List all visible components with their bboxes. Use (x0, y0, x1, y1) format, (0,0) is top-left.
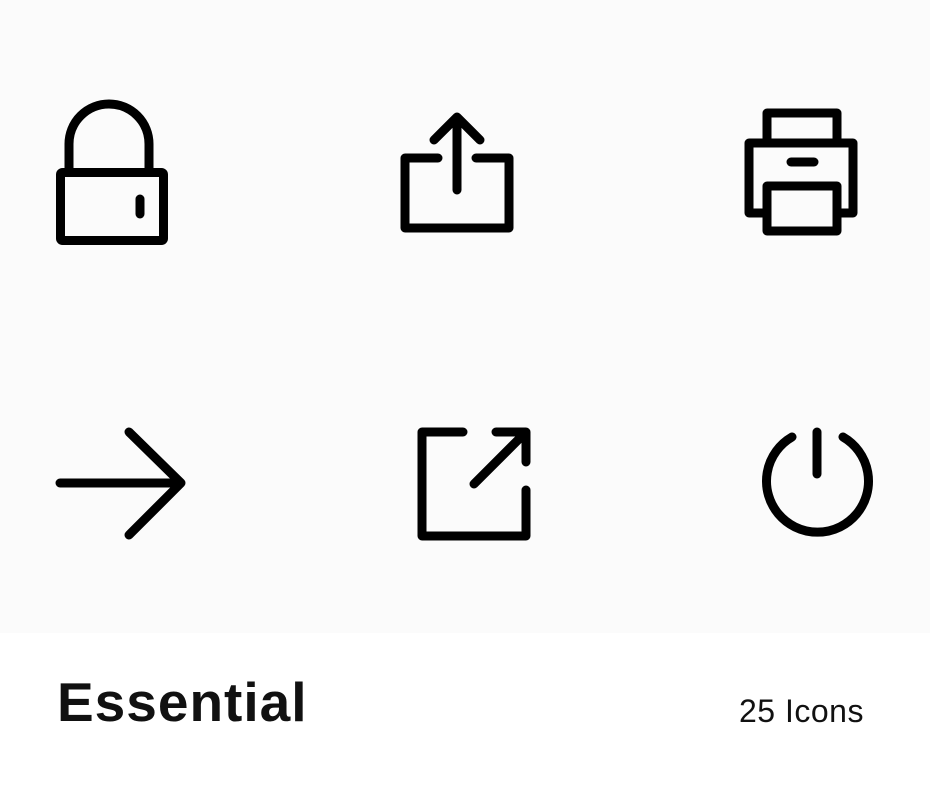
icon: printer (749, 113, 853, 231)
icon: lock (60, 104, 164, 240)
icon: arrow right (60, 432, 181, 535)
icon: external link (422, 432, 526, 536)
icon: power (767, 432, 869, 532)
title: Essential (57, 671, 308, 733)
icon count: 25 Icons (739, 693, 864, 729)
icon: share (405, 117, 509, 228)
